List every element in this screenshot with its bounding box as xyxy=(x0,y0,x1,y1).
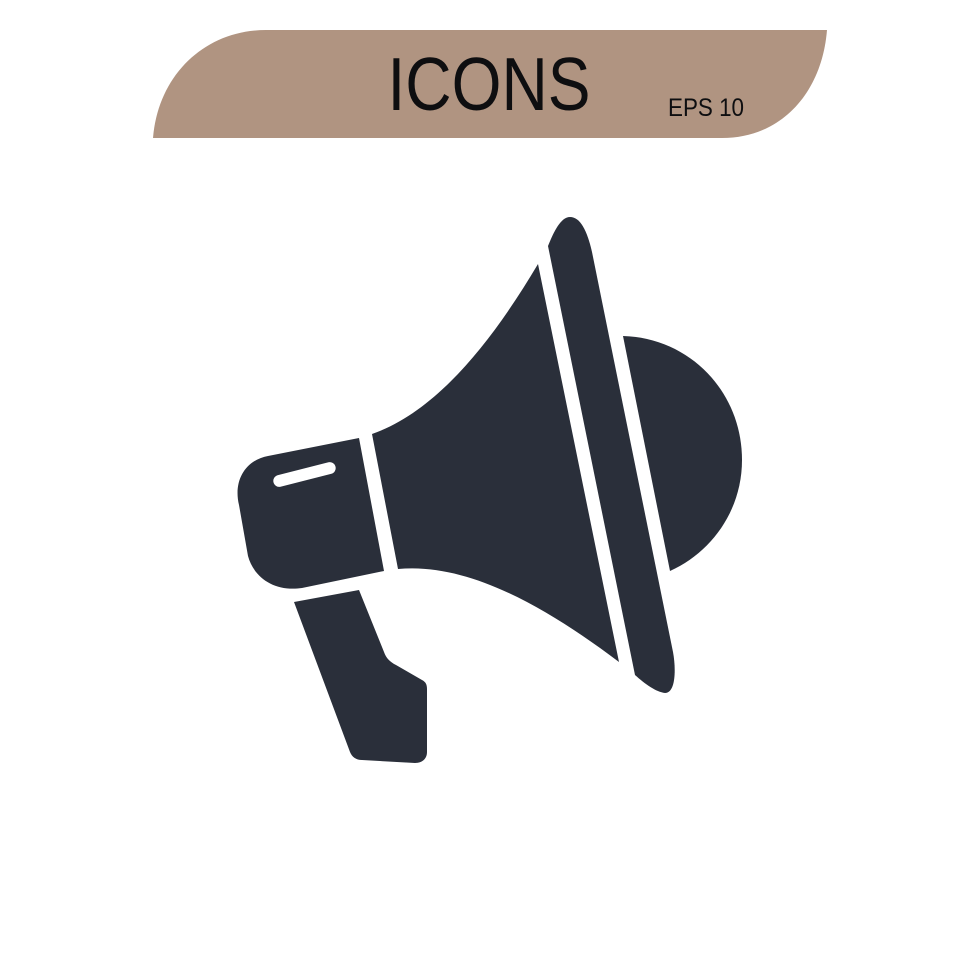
title: ICONS xyxy=(388,42,590,126)
icon: megaphone xyxy=(238,217,742,763)
megaphone horn xyxy=(372,264,619,662)
subtitle: EPS 10 xyxy=(668,94,744,122)
megaphone rim xyxy=(548,217,675,693)
banner shape xyxy=(153,30,827,138)
megaphone body xyxy=(238,438,384,589)
banner xyxy=(153,30,827,138)
megaphone handle xyxy=(294,590,427,763)
megaphone back dome xyxy=(623,336,742,571)
